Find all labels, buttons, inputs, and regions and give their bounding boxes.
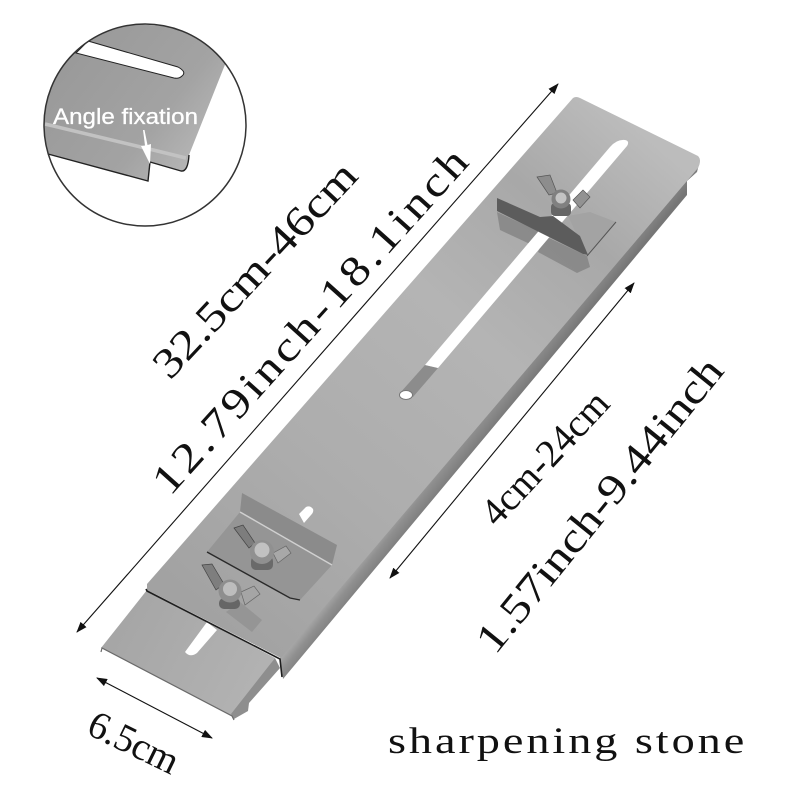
lower bracket with wing nut (207, 493, 337, 600)
wing nut lower (202, 564, 262, 632)
dimension arrow: width (97, 678, 212, 738)
label: width: 6.5cm (81, 702, 186, 783)
main plate side flange (280, 160, 700, 679)
lower slot end (299, 506, 313, 523)
caption: sharpening stone: sharpening stone (388, 721, 744, 762)
inset ring (44, 24, 246, 226)
joint line between plates (146, 589, 282, 677)
upper slot (400, 140, 628, 400)
top bracket shadow (497, 212, 590, 273)
dimension arrow: overall length (77, 84, 558, 632)
label: slot length in cm: 4cm-24cm (472, 382, 618, 534)
label: slot length in inches: 1.57inch-9.44inch (467, 349, 733, 662)
label: length in inches: 12.79inch-18.1inch (143, 139, 478, 504)
label: length in cm: 32.5cm-46cm (144, 153, 367, 388)
main plate top surface (147, 97, 700, 658)
top bracket with wing nut (497, 175, 616, 256)
icon: white pointer arrow (141, 130, 151, 164)
lower sliding plate (101, 590, 280, 720)
wing nut upper (234, 525, 291, 570)
inset plate detail (44, 24, 225, 182)
text: angle fixation: Angle fixation (53, 104, 198, 129)
sharpening holder product (101, 97, 700, 720)
dimension arrow: slot length (390, 283, 634, 578)
wing nut top (537, 175, 590, 216)
inset: angle fixation detail (30, 20, 246, 226)
